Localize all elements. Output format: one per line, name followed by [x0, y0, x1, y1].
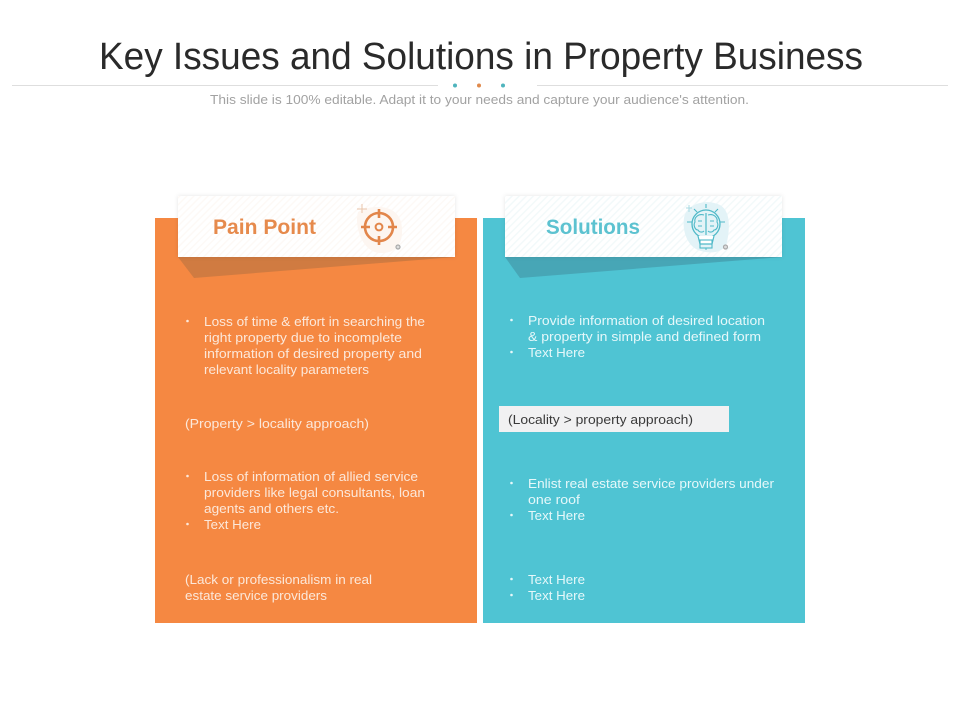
text block: first solution: [510, 313, 765, 360]
text block: first solution: Provide information of desired location: [528, 313, 765, 328]
icon: brain light bulb: [684, 202, 729, 252]
text block: first issue: [186, 314, 425, 377]
text: professionalism note: [185, 572, 372, 603]
text block: second solution: [510, 476, 775, 523]
text block: first issue: relevant locality parameters: [204, 362, 370, 377]
text block: second issue: Loss of information of allied service: [204, 469, 418, 484]
text block: first solution: & property in simple and defined form: [528, 329, 761, 344]
panel: pain point: [155, 196, 477, 623]
folded shadow: [178, 257, 455, 278]
header divider with three dots: [12, 84, 948, 88]
text block: third solution: [510, 572, 585, 603]
callout: locality approach: (Locality > property approach): [508, 412, 693, 427]
text block: third solution: Text Here: [528, 572, 585, 587]
subtitle: This slide is 100% editable. Adapt it to your needs and capture your audience's attention.: [210, 92, 749, 107]
text block: first issue: Loss of time & effort in searching the: [204, 314, 425, 329]
text block: second issue: providers like legal consultants, loan: [204, 485, 425, 500]
text block: first solution: Text Here: [528, 345, 585, 360]
title: Key Issues and Solutions in Property Business: [99, 36, 863, 78]
header card: [505, 196, 782, 257]
panel background: teal: [483, 218, 805, 623]
text block: first issue: right property due to incomplete: [204, 330, 402, 345]
text block: third solution: Text Here: [528, 588, 585, 603]
folded shadow: [505, 257, 782, 278]
icon: target: [357, 204, 402, 253]
text block: second solution: Enlist real estate service providers under: [528, 476, 775, 491]
text block: first issue: information of desired property and: [204, 346, 422, 361]
panel background: orange: [155, 218, 477, 623]
text: professionalism note: estate service providers: [185, 588, 328, 603]
text block: second issue: [186, 469, 425, 532]
panel: solutions: [483, 196, 805, 623]
text: professionalism note: (Lack or professionalism in real: [185, 572, 372, 587]
heading: solutions: Solutions: [546, 216, 640, 239]
text block: second solution: one roof: [528, 492, 580, 507]
text block: second solution: Text Here: [528, 508, 585, 523]
text block: second issue: agents and others etc.: [204, 501, 339, 516]
heading: pain point: Pain Point: [213, 216, 316, 239]
callout: locality approach: [499, 406, 729, 432]
text block: second issue: Text Here: [204, 517, 261, 532]
header card: [178, 196, 455, 257]
text: property approach: (Property > locality approach): [185, 416, 369, 431]
